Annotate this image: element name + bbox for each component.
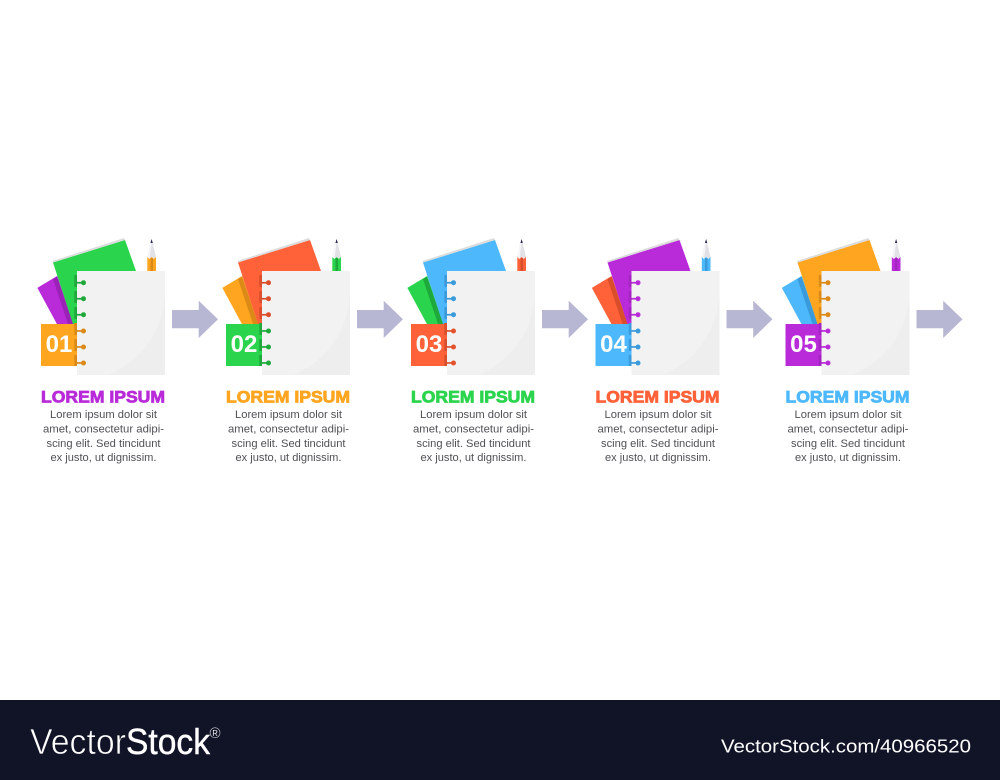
number: 05 [790, 331, 817, 358]
heading 5: LOREM IPSUM [786, 388, 910, 406]
notebook page [822, 271, 910, 375]
icon: notebook stack 4 [592, 238, 720, 375]
arrow 2 [357, 301, 403, 338]
text block 4: amet, consectetur adipi- [598, 424, 719, 436]
registered mark: ® [210, 725, 221, 742]
pencil [702, 239, 710, 271]
number tab [786, 324, 822, 366]
text block 1: ex justo, ut dignissim. [50, 452, 156, 464]
number: 01 [46, 331, 72, 358]
text block 3: ex justo, ut dignissim. [420, 452, 526, 464]
text block 3: Lorem ipsum dolor sit [420, 409, 527, 421]
spiral rings [444, 275, 456, 366]
big book [238, 240, 321, 324]
arrow 1 [172, 301, 218, 338]
arrow 4 [726, 301, 772, 338]
text block 3: amet, consectetur adipi- [413, 424, 534, 436]
text block 4 [598, 409, 719, 464]
number: 02 [231, 331, 257, 358]
text block 5: amet, consectetur adipi- [788, 424, 909, 436]
pencil [332, 239, 341, 271]
text block 4: scing elit. Sed tincidunt [601, 438, 715, 450]
small book [223, 277, 258, 324]
text block 2: Lorem ipsum dolor sit [235, 409, 342, 421]
text block 4: ex justo, ut dignissim. [605, 452, 711, 464]
heading 1: LOREM IPSUM [41, 388, 165, 406]
text block 2: ex justo, ut dignissim. [236, 452, 342, 464]
arrow 5 [916, 301, 962, 338]
text block 1: amet, consectetur adipi- [43, 424, 164, 436]
pencil [517, 239, 526, 271]
text block 2 [228, 409, 349, 464]
heading 4: LOREM IPSUM [596, 388, 720, 406]
text block 5 [788, 409, 909, 464]
small book [408, 277, 443, 324]
text block 2: scing elit. Sed tincidunt [232, 438, 346, 450]
number tab [411, 324, 447, 366]
notebook page [632, 271, 720, 375]
text block 2: amet, consectetur adipi- [228, 424, 349, 436]
notebook page [77, 271, 165, 375]
small book [38, 277, 73, 324]
number: 04 [600, 331, 627, 358]
spiral rings [74, 275, 86, 366]
heading 3: LOREM IPSUM [411, 388, 535, 406]
text block 3 [413, 409, 534, 464]
icon: notebook stack 5 [782, 238, 910, 375]
big book [608, 240, 690, 324]
big book [423, 240, 506, 324]
text block 4: Lorem ipsum dolor sit [604, 409, 712, 421]
image id: VectorStock.com/40966520 [721, 736, 971, 756]
pencil [892, 239, 900, 271]
small book [592, 277, 628, 324]
text block 5: Lorem ipsum dolor sit [794, 409, 902, 421]
small book [782, 277, 818, 324]
step 3 [408, 238, 588, 464]
icon: notebook stack 2 [223, 238, 350, 375]
icon: notebook stack 3 [408, 238, 535, 375]
number: 03 [416, 331, 442, 358]
pencil [147, 239, 156, 271]
text block 1: scing elit. Sed tincidunt [46, 438, 160, 450]
spiral rings [819, 275, 830, 366]
spiral rings [259, 275, 271, 366]
notebook page [447, 271, 535, 375]
text block 1 [43, 409, 164, 464]
step 2 [223, 238, 403, 464]
text block 1: Lorem ipsum dolor sit [50, 409, 157, 421]
arrow 3 [542, 301, 588, 338]
spiral rings [629, 275, 640, 366]
big book [798, 240, 880, 324]
footer band [0, 700, 1000, 780]
heading 2: LOREM IPSUM [226, 388, 350, 406]
step 5 [782, 238, 962, 464]
step 4 [592, 238, 772, 464]
big book [53, 240, 136, 324]
number tab [596, 324, 632, 366]
watermark logo: Vector [30, 721, 126, 762]
number tab [226, 324, 262, 366]
number tab [41, 324, 77, 366]
text block 3: scing elit. Sed tincidunt [416, 438, 530, 450]
text block 5: ex justo, ut dignissim. [795, 452, 901, 464]
watermark logo bold part: Stock [126, 721, 211, 762]
text block 5: scing elit. Sed tincidunt [791, 438, 905, 450]
icon: notebook stack 1 [38, 238, 165, 375]
step 1 [38, 238, 218, 464]
notebook page [262, 271, 350, 375]
